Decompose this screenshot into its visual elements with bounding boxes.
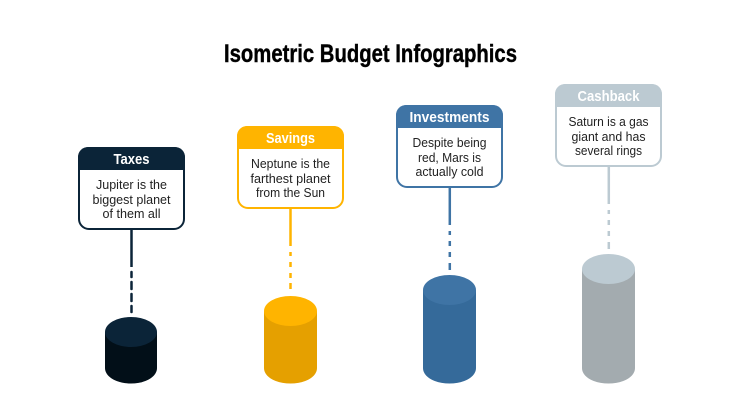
card: Taxes: biggest planet xyxy=(92,192,171,207)
connector line: Savings xyxy=(289,208,292,289)
card: Savings: from the Sun xyxy=(256,185,325,200)
card: Investments: Despite being xyxy=(412,135,486,150)
card: Investments: red, Mars is xyxy=(418,150,481,165)
cylinder: Investments xyxy=(423,275,476,384)
card: Savings xyxy=(237,126,344,208)
card: Taxes: of them all xyxy=(102,206,161,221)
connector line: Investments xyxy=(449,187,451,270)
connector line: Taxes xyxy=(130,229,133,312)
cylinder: Savings xyxy=(264,296,317,384)
card: Cashback: Cashback xyxy=(578,89,640,105)
card: Cashback: Saturn is a gas xyxy=(568,114,649,129)
cylinder: Cashback xyxy=(582,254,635,384)
card: Cashback: giant and has xyxy=(572,129,646,144)
card: Cashback: several rings xyxy=(575,143,642,158)
title: Isometric Budget Infographics xyxy=(224,40,517,68)
column: Taxes xyxy=(78,147,185,384)
column: Savings xyxy=(237,126,344,384)
column: Cashback xyxy=(555,84,662,384)
cylinder: Taxes xyxy=(105,317,157,384)
column: Investments xyxy=(396,105,503,384)
card: Investments xyxy=(396,105,503,187)
card: Investments: Investments xyxy=(410,110,490,126)
connector line: Cashback xyxy=(608,166,610,249)
card: Cashback xyxy=(555,84,662,166)
card: Taxes xyxy=(78,147,185,229)
card: Taxes: Taxes xyxy=(114,152,150,168)
card: Savings: Neptune is the xyxy=(251,156,330,171)
card: Investments: actually cold xyxy=(416,164,484,179)
card: Savings: farthest planet xyxy=(250,171,331,186)
card: Taxes: Jupiter is the xyxy=(96,177,167,192)
card: Savings: Savings xyxy=(266,131,315,147)
